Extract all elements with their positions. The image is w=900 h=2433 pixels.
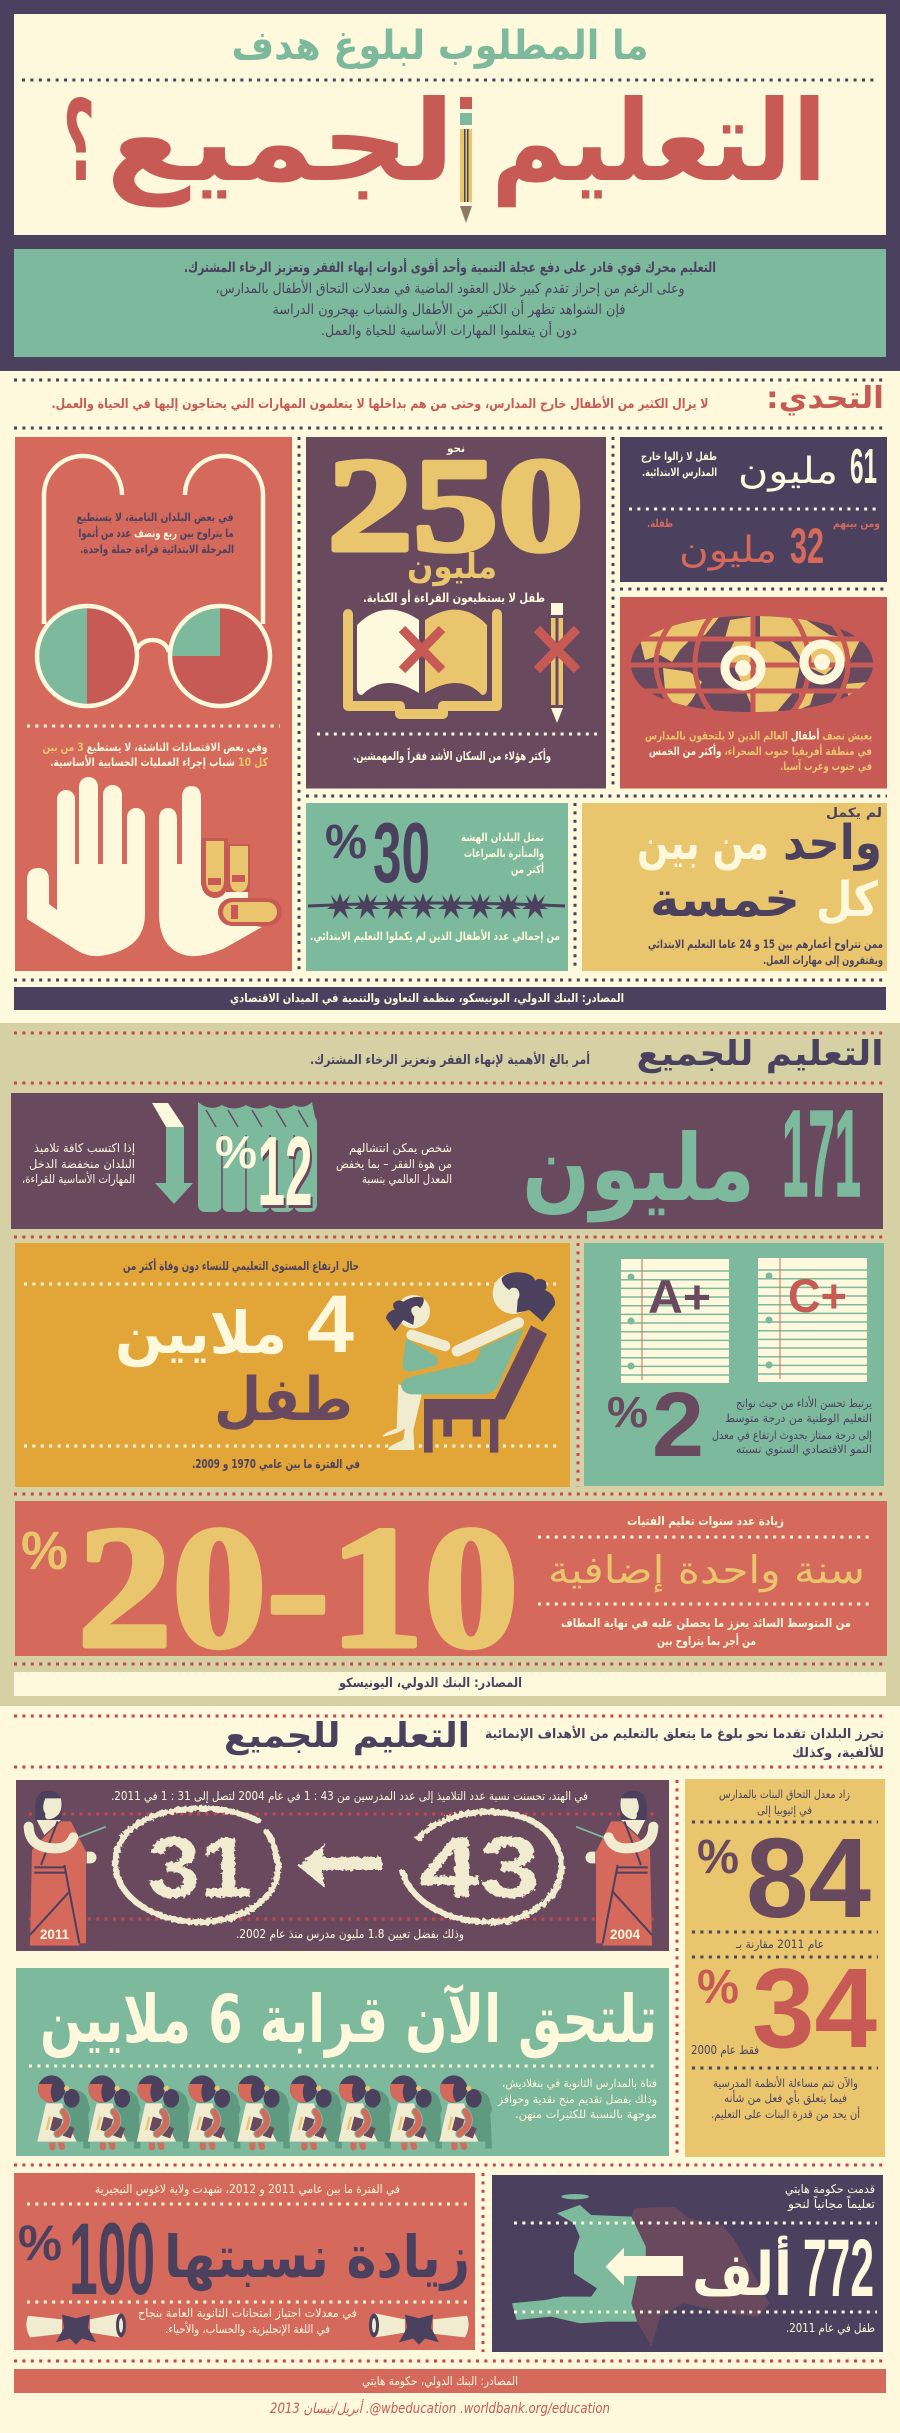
panel: 30 percent conflict: تمثل البلدان الهشة: [461, 831, 544, 844]
panel: test scores and growth: النمو الاقتصادي السنوي نسبته: [736, 1442, 872, 1457]
icon: book stack 12 percent: [198, 1102, 317, 1229]
panel: Bangladesh girls: تلتحق الآن قرابة 6 ملايين: [40, 1981, 657, 2059]
title: [63, 77, 827, 208]
panel: 61 million out of school: مليون: [738, 451, 838, 492]
text: reading in developing countries: المرحلة الابتدائية قراءة جملة واحدة.: [80, 542, 234, 557]
panel: 10-20 percent wages: سنة واحدة إضافية: [548, 1548, 865, 1593]
source bar 3: [14, 2369, 886, 2393]
panel: Ethiopia enrolment: %: [697, 1831, 739, 1884]
panel: 171 million: من هوة الفقر – بما يخفض: [336, 1157, 452, 1172]
panel: 30 percent conflict: [306, 803, 568, 971]
panel: pupil teacher ratio India: وذلك بفضل تعيين 1.8 مليون مدرس منذ عام 2002.: [236, 1927, 464, 1942]
source bar 2: المصادر: البنك الدولي، اليونيسكو: [338, 1676, 522, 1691]
subtitle: ما المطلوب لبلوغ هدف: [232, 23, 648, 69]
panel: 10-20 percent wages: من المتوسط السائد يعزز ما يحصلن عليه في نهاية المطاف: [561, 1616, 851, 1631]
panel: one in five: [582, 803, 887, 971]
panel: 61 million out of school: مليون: [679, 530, 777, 571]
source bar 3: المصادر: البنك الدولي، حكومة هايتي: [362, 2374, 518, 2389]
text: reading in developing countries: [76, 510, 234, 557]
panel: Haiti 772 thousand: طفل في عام 2011.: [786, 2321, 875, 2335]
icon: row of schoolgirls: [37, 2075, 492, 2150]
title: التعليم: [491, 77, 827, 208]
panel: 4 million children: في الفترة ما بين عامي 1970 و 2009.: [192, 1457, 360, 1472]
number: 250: 250: [328, 431, 584, 579]
panel: one in five: خمسة: [650, 872, 800, 928]
heading: التعليم للجميع: [636, 1034, 884, 1074]
icon: chalk 43: 43: [419, 1820, 540, 1916]
panel: 171 million: المهارات الأساسية للقراءة،: [22, 1171, 135, 1187]
icon: book stack 12 percent: 12: [260, 1119, 314, 1229]
panel: glasses and hands: [15, 437, 292, 971]
icon: chalk 31: [115, 1808, 278, 1922]
panel: 171 million: شخص يمكن انتشالهم: [349, 1141, 452, 1156]
icon: crossed pencil: [537, 603, 577, 723]
icon: teacher 2011: 2011: [40, 1926, 69, 1942]
section: education for all matters: أمر بالغ الأهمية لإنهاء الفقر وتعزيز الرخاء المشترك.: [310, 1051, 590, 1068]
heading: the challenge: [14, 380, 887, 980]
panel: test scores and growth: إلى درجة ممتاز بحدوث ارتفاع في معدل: [712, 1428, 872, 1443]
panel: 250 million: [306, 431, 606, 788]
panel: 4 million children: ملايين: [115, 1299, 287, 1368]
icon: chalk arrow: [298, 1843, 382, 1888]
section heading: progress: [14, 1716, 886, 2361]
intro panel: [14, 249, 886, 357]
panel: 61 million out of school: ومن بينهم: [833, 517, 880, 530]
icon: teacher 2004: 2004: [610, 1926, 640, 1942]
panel: 250 million: مليون: [407, 547, 497, 587]
icon: glasses pie charts: [37, 456, 270, 706]
panel: Lagos 100 percent: 100: [69, 2202, 155, 2316]
panel: Lagos 100 percent: في معدلات اجتياز امتحانات الثانوية العامة بنجاح: [138, 2306, 357, 2321]
source bar 1: [14, 987, 886, 1010]
panel: Ethiopia enrolment: زاد معدل التحاق البنات بالمدارس: [719, 1787, 850, 1802]
icon: diploma right: [369, 2313, 469, 2345]
panel: 10-20 percent wages: %: [21, 1521, 68, 1581]
panel: Bangladesh girls: وذلك بفضل تقديم منح نقدية وحوافز: [497, 2092, 657, 2107]
intro panel: وعلى الرغم من إحراز تقدم كبير خلال العقود الماضية في معدلات التحاق الأطفال بالمدارس،: [216, 279, 684, 297]
heading: the challenge: التحدي:: [766, 381, 884, 416]
text: half of out of school children: [645, 728, 872, 774]
credit line: 2013 أبريل/نيسان .@wbeducation .worldbank.org/education: [270, 2399, 610, 2417]
panel: Lagos 100 percent: في اللغة الإنجليزية، والحساب، والأحياء.: [165, 2321, 330, 2337]
panel: 30 percent conflict: أكثر من: [511, 862, 544, 876]
panel: header: [0, 0, 900, 371]
panel: 4 million children: طفل: [214, 1365, 353, 1435]
panel: test scores and growth: %: [607, 1388, 648, 1437]
icon: counting hands: [27, 777, 282, 956]
panel: 30 percent conflict: %: [325, 816, 367, 869]
heading: the challenge: لا يزال الكثير من الأطفال خارج المدارس، وحتى من هم بداخلها لا يتعلمون المهارات التي يحتاجون إليها في الحياة والعمل.: [52, 395, 708, 412]
panel: 61 million out of school: طفلة.: [647, 517, 673, 530]
icon: chalk 31: 31: [148, 1820, 252, 1916]
icon: C+ paper: [758, 1258, 867, 1382]
panel: test scores and growth: [584, 1243, 884, 1486]
icon: crossed book: [348, 610, 497, 714]
icon: barbed wire: [308, 893, 565, 919]
panel: Ethiopia enrolment: [685, 1779, 885, 2157]
panel: 4 million children: حال ارتفاع المستوى التعليمي للنساء دون وفاة أكثر من: [123, 1258, 359, 1274]
panel: 250 million: وأكثر هؤلاء من السكان الأشد فقراً والمهمشين.: [353, 747, 551, 764]
section heading: progress: التعليم للجميع: [224, 1716, 470, 1756]
panel: 10-20 percent wages: من أجر بما يتراوح بين: [657, 1633, 756, 1649]
panel: 61 million out of school: طفل لا زالوا خارج: [641, 450, 717, 464]
icon: down arrow: [152, 1103, 193, 1204]
panel: Haiti 772 thousand: قدمت حكومة هايتي: [785, 2182, 875, 2197]
panel: 30 percent conflict: من إجمالي عدد الأطفال الذين لم يكملوا التعليم الابتدائي.: [310, 929, 560, 944]
panel: Haiti 772 thousand: [492, 2175, 883, 2352]
panel: one in five: كل: [816, 872, 878, 928]
panel: 171 million: [11, 1086, 883, 1229]
panel: test scores and growth: التعليم الوطنية من درجة متوسط: [725, 1411, 872, 1426]
panel: Lagos 100 percent: زيادة نسبتها: [164, 2223, 470, 2292]
panel: Ethiopia enrolment: %: [697, 1961, 739, 2014]
panel: Ethiopia enrolment: 84: [746, 1815, 871, 1941]
panel: Ethiopia enrolment: أن يحد من قدرة البنات على التعليم.: [711, 2106, 860, 2122]
intro panel: دون أن يتعلموا المهارات الأساسية للحياة والعمل.: [321, 321, 577, 339]
icon: book stack 12 percent: 12: [258, 1116, 312, 1226]
panel: one in five: لم يكمل: [826, 806, 882, 821]
source bar 2: [14, 1672, 886, 1696]
icon: mother and child: [383, 1272, 555, 1453]
text: reading in developing countries: ما يتراوح بين ربع ونصف عدد من أتموا: [78, 525, 234, 541]
panel: 61 million out of school: المدارس الابتدائية.: [642, 466, 717, 479]
panel: Ethiopia enrolment: فيما يتعلق بأي فعل من شأنه: [724, 2090, 847, 2106]
intro panel: التعليم محرك قوي قادر على دفع عجلة التنمية وأحد أقوى أدوات إنهاء الفقر وتعزيز الرخاء المشترك.: [184, 258, 716, 277]
section heading: progress: للألفية، وكذلك: [792, 1744, 884, 1761]
panel: 61 million out of school: [620, 437, 887, 582]
text: reading in developing countries: في بعض البلدان النامية، لا يستطيع: [76, 510, 234, 524]
icon: A+ paper: A+: [648, 1270, 711, 1323]
panel: 61 million out of school: 32: [790, 518, 824, 574]
icon: A+ paper: [621, 1259, 729, 1383]
icon: chalk 43: [402, 1812, 562, 1922]
panel: Ethiopia enrolment: 34: [752, 1945, 877, 2071]
panel: 10-20 percent wages: [15, 1490, 887, 1684]
panel: 171 million: المعدل العالمي بنسبة: [362, 1172, 452, 1186]
icon: book stack 12 percent: %: [215, 1126, 257, 1178]
panel: 171 million: إذا اكتسب كافة تلاميذ: [34, 1141, 135, 1155]
panel: Haiti 772 thousand: ألف: [692, 2235, 792, 2310]
panel: 250 million: نحو: [446, 442, 465, 455]
panel: Haiti 772 thousand: تعليماً مجانياً لنحو: [787, 2195, 875, 2212]
panel: 250 million: طفل لا يستطيعون القراءة أو الكتابة.: [363, 589, 545, 605]
icon: globe with eyes: [631, 616, 873, 712]
panel: world map: [620, 589, 887, 788]
intro panel: فإن الشواهد تظهر أن الكثير من الأطفال والشباب يهجرون الدراسة: [272, 300, 626, 318]
section: education for all matters: [0, 1023, 900, 1706]
panel: Lagos 100 percent: [14, 2173, 475, 2350]
panel: pupil teacher ratio India: [16, 1780, 669, 1951]
panel: one in five: من بين: [637, 815, 769, 871]
panel: 30 percent conflict: 30: [373, 806, 430, 901]
icon: teacher 2004: [576, 1791, 653, 1946]
panel: one in five: واحد: [783, 815, 882, 871]
panel: 171 million: مليون: [522, 1115, 755, 1223]
title: لجميع: [106, 77, 455, 207]
panel: 30 percent conflict: والمتأثرة بالصراعات: [464, 846, 544, 860]
panel: 10-20 percent wages: زيادة عدد سنوات تعليم الفتيات: [627, 1514, 784, 1529]
panel: Ethiopia enrolment: والآن تتم مساءلة الأنظمة المدرسية: [713, 2076, 858, 2091]
panel: test scores and growth: 2: [652, 1374, 704, 1476]
source bar 1: المصادر: البنك الدولي، اليونيسكو، منظمة التعاون والتنمية في الميدان الاقتصادي: [230, 991, 624, 1006]
panel: Ethiopia enrolment: عام 2011 مقارنة بـ: [735, 1937, 824, 1952]
title: ؟: [63, 77, 95, 207]
panel: 4 million children: [15, 1243, 570, 1487]
panel: Bangladesh girls: [16, 1968, 669, 2156]
text: numeracy in emerging economies: وفي بعض الاقتصادات الناشئة، لا يستطيع 3 من بين: [42, 740, 268, 755]
panel: pupil teacher ratio India: في الهند، تحسنت نسبة عدد التلاميذ إلى عدد المدرسين من 43 : 1 في عام 2004 لتصل إلى 31 : 1 في 2011.: [111, 1789, 588, 1804]
panel: 4 million children: 4: [307, 1279, 354, 1370]
icon: teacher 2011: [29, 1791, 106, 1946]
panel: Bangladesh girls: موجهة بالنسبة للكثيرات منهن.: [515, 2107, 657, 2122]
panel: 171 million: البلدان منخفضة الدخل: [29, 1157, 135, 1171]
panel: Bangladesh girls: فتاة بالمدارس الثانوية في بنغلاديش،: [502, 2076, 657, 2091]
icon: pencil: [460, 97, 472, 223]
icon: map of Hispaniola: [512, 2194, 769, 2347]
panel: Lagos 100 percent: %: [18, 2215, 62, 2271]
panel: Ethiopia enrolment: في إثيوبيا إلى: [757, 1803, 812, 1818]
icon: diploma left: [26, 2313, 126, 2345]
panel: Lagos 100 percent: في الفترة ما بين عامي 2011 و 2012، شهدت ولاية لاغوس النيجيرية: [95, 2182, 400, 2197]
panel: 10-20 percent wages: 20-10: [78, 1490, 518, 1684]
panel: test scores and growth: يرتبط تحسن الأداء من حيث نواتج: [736, 1396, 872, 1411]
text: numeracy in emerging economies: [42, 740, 268, 769]
text: numeracy in emerging economies: كل 10 شباب إجراء العمليات الحسابية الأساسية.: [50, 755, 268, 769]
section heading: progress: تحرز البلدان تقدما نحو بلوغ ما يتعلق بالتعليم من الأهداف الإنمائية: [485, 1725, 884, 1742]
icon: C+ paper: C+: [788, 1269, 847, 1322]
panel: Ethiopia enrolment: فقط عام 2000: [691, 2043, 759, 2057]
text: half of out of school children: يعيش نصف أطفال العالم الذين لا يلتحقون بالمدارس: [645, 728, 872, 744]
